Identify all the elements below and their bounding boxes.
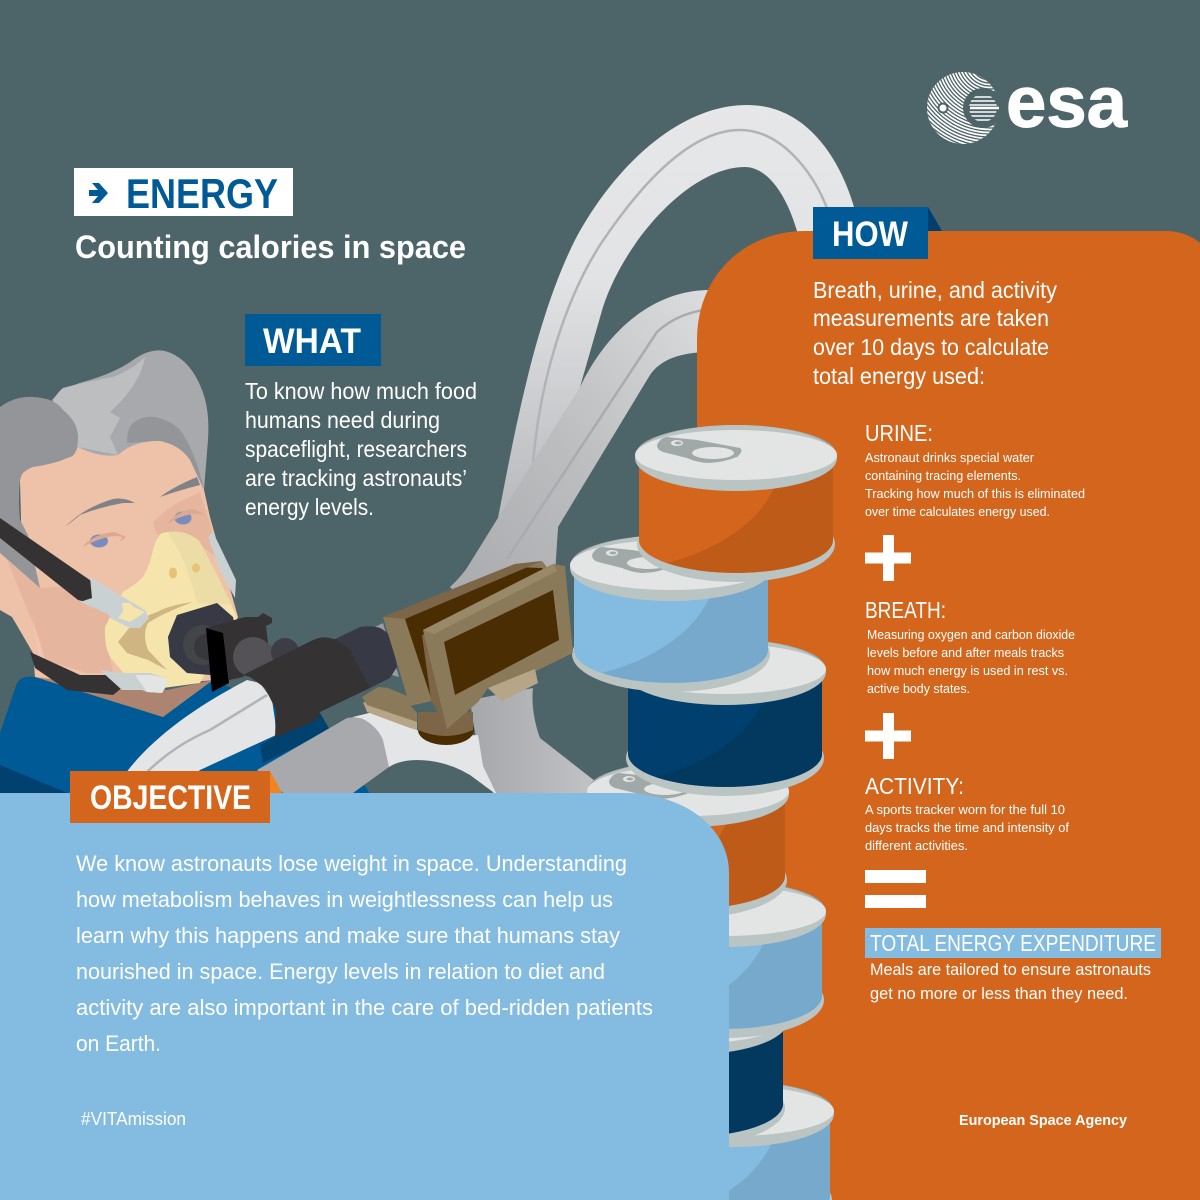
what body text: [245, 378, 477, 520]
icon: equals: [865, 870, 926, 908]
objective body text: nourished in space. Energy levels in relation to diet and: [76, 959, 605, 984]
icon: arrow: [89, 183, 108, 203]
total energy text: [870, 960, 1151, 1003]
activity block: ACTIVITY:: [865, 773, 964, 799]
icon: plus: [865, 535, 911, 581]
panel: what: [245, 314, 477, 520]
icon: plus: [865, 713, 911, 759]
activity block: [865, 773, 1070, 853]
urine block: Astronaut drinks special water: [865, 451, 1034, 465]
illustration: astronaut head: [0, 350, 238, 717]
objective body text: learn why this happens and make sure that humans stay: [76, 923, 620, 948]
objective body text: [76, 851, 653, 1056]
illustration: dark tube: [243, 623, 399, 738]
illustration: white arm hose: [112, 680, 276, 795]
panel: how background: [697, 231, 1200, 1200]
activity block: different activities.: [865, 839, 968, 853]
what heading: WHAT: [263, 322, 361, 361]
breath block: Measuring oxygen and carbon dioxide: [867, 628, 1075, 642]
how tab fold: [928, 207, 942, 231]
what body text: are tracking astronauts’: [245, 465, 467, 491]
urine block: [865, 420, 1085, 519]
what body text: spaceflight, researchers: [245, 436, 467, 462]
energy heading box: [74, 168, 293, 216]
objective body text: on Earth.: [76, 1031, 161, 1056]
logo emblem: [927, 72, 999, 144]
breath block: how much energy is used in rest vs.: [867, 664, 1068, 678]
objective heading tab: [70, 771, 270, 823]
what body text: To know how much food: [245, 378, 477, 404]
illustration: mask outlet and valve: [168, 603, 299, 692]
activity block: days tracks the time and intensity of: [865, 821, 1070, 835]
activity block: A sports tracker worn for the full 10: [865, 803, 1065, 817]
breath block: [865, 597, 1075, 696]
total energy text: get no more or less than they need.: [870, 984, 1128, 1003]
illustration: stack of food cans: [570, 425, 837, 1200]
urine block: containing tracing elements.: [865, 469, 1021, 483]
panel: how: [813, 207, 1161, 1129]
subtitle: Counting calories in space: [75, 229, 466, 265]
what body text: humans need during: [245, 407, 440, 433]
urine block: over time calculates energy used.: [865, 505, 1050, 519]
urine block: Tracking how much of this is eliminated: [865, 487, 1085, 501]
how intro text: over 10 days to calculate: [813, 334, 1049, 360]
illustration: oxygen mask: [0, 518, 237, 695]
credit: European Space Agency: [959, 1112, 1128, 1129]
panel: objective: [0, 771, 729, 1200]
how intro text: measurements are taken: [813, 305, 1049, 331]
how intro text: [813, 277, 1057, 389]
logo wordmark: esa: [1006, 63, 1128, 143]
objective body text: We know astronauts lose weight in space. Understanding: [76, 851, 627, 876]
objective body text: how metabolism behaves in weightlessness can help us: [76, 887, 613, 912]
what heading box: [245, 314, 381, 366]
total energy text: Meals are tailored to ensure astronauts: [870, 960, 1151, 979]
how intro text: total energy used:: [813, 363, 985, 389]
objective heading: OBJECTIVE: [90, 779, 251, 817]
energy heading: ENERGY: [126, 170, 278, 217]
objective tab fold: [270, 771, 282, 793]
illustration: breathing hoses: [450, 105, 858, 620]
urine block: URINE:: [865, 420, 933, 446]
breath block: BREATH:: [865, 597, 946, 623]
breath block: active body states.: [867, 682, 970, 696]
illustration: grey cuff: [257, 717, 389, 793]
logo: esa: [927, 72, 1128, 144]
illustration: gas analyser box: [362, 561, 573, 745]
objective body text: activity are also important in the care of bed-ridden patients: [76, 995, 653, 1020]
what body text: energy levels.: [245, 494, 374, 520]
illustration: lower hose: [470, 688, 620, 800]
how heading box: [813, 207, 928, 259]
illustration: astronaut shirt: [0, 677, 372, 797]
hashtag: #VITAmission: [81, 1109, 186, 1129]
how intro text: Breath, urine, and activity: [813, 277, 1057, 303]
breath block: levels before and after meals tracks: [867, 646, 1064, 660]
illustration: white hose connector: [353, 712, 497, 795]
panel: title: [74, 168, 466, 265]
how heading: HOW: [832, 215, 908, 254]
